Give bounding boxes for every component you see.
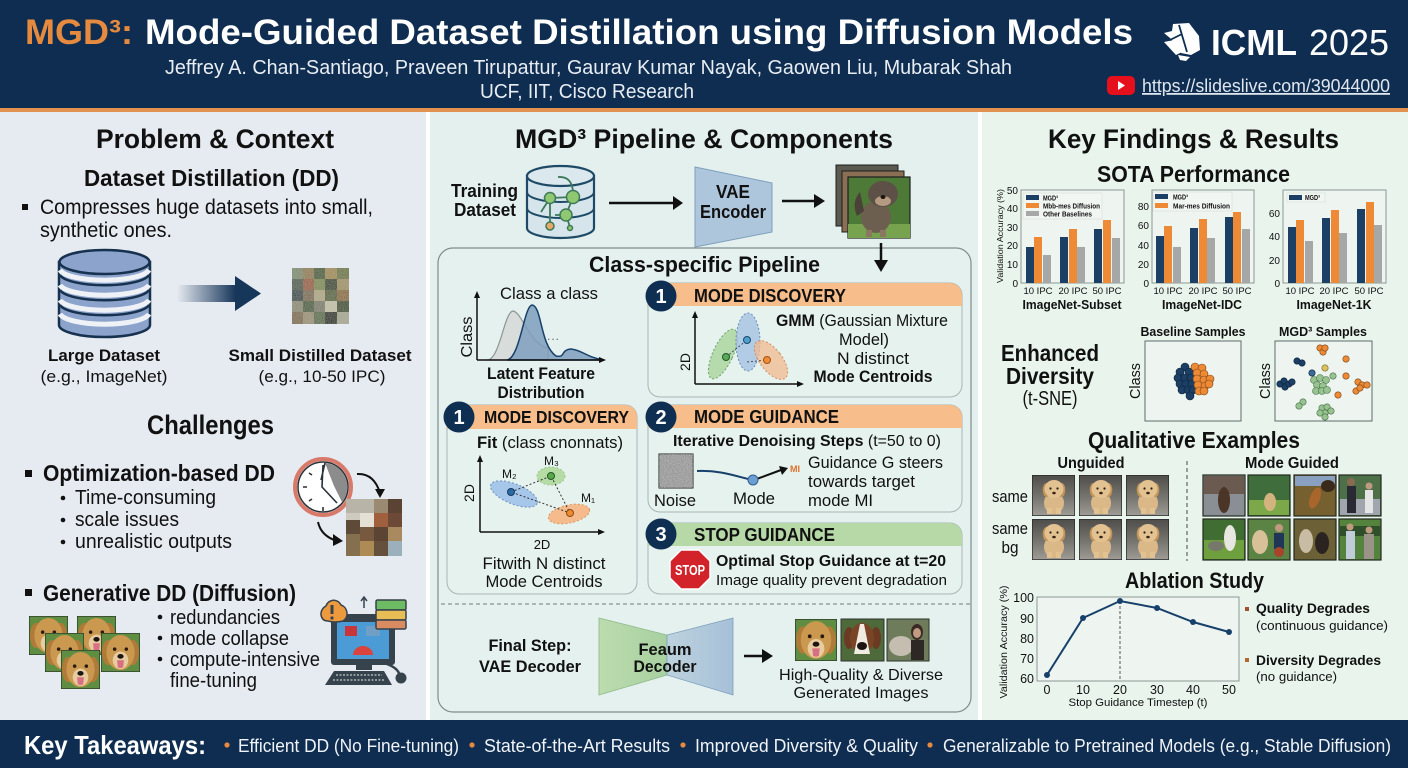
bar chart: ImageNet-IDC: 10 IPC <box>1153 286 1183 297</box>
text: generated images caption: High-Quality & Diverse <box>779 667 943 684</box>
line chart: stop guidance timestep: Stop Guidance Timestep (t) <box>1068 697 1208 709</box>
bar chart: ImageNet-1K: 10 IPC <box>1285 286 1315 297</box>
card: stop guidance: Image quality prevent degradation <box>716 572 947 589</box>
bar chart: ImageNet-IDC: 50 IPC <box>1222 286 1252 297</box>
line chart: stop guidance timestep: 60 <box>1020 672 1034 686</box>
bar chart: ImageNet-Subset: Mbb-mes Diffusion <box>1043 204 1100 210</box>
footer: key takeaways: Key Takeaways: <box>24 730 206 760</box>
text: GMM description: GMM (Gaussian Mixture <box>776 312 948 330</box>
generated images <box>795 619 929 661</box>
text: GMM description: Model) <box>839 331 889 349</box>
challenge: generative diffusion: mode collapse <box>170 628 289 650</box>
panel: pipeline and components <box>430 112 978 720</box>
line chart: stop guidance timestep: 70 <box>1020 652 1034 666</box>
bar chart: ImageNet-Subset: 50 IPC <box>1092 286 1122 297</box>
text: enhanced diversity: (t-SNE) <box>1022 388 1078 410</box>
arrow: distillation <box>177 276 261 311</box>
decoder block <box>599 618 733 695</box>
chart: latent feature distribution: Latent Feature <box>487 364 595 383</box>
label: training dataset: Training <box>451 181 518 201</box>
dashed separator <box>1186 461 1188 561</box>
divider <box>441 603 970 605</box>
line chart: stop guidance timestep: 0 <box>1044 683 1051 697</box>
chart: fitted modes: 2D <box>534 537 550 552</box>
bar chart: ImageNet-Subset: 50 <box>1007 186 1018 197</box>
line chart: stop guidance timestep: 10 <box>1076 683 1090 697</box>
line chart: stop guidance timestep: Validation Accuracy (%) <box>998 586 1010 698</box>
VAE encoder block: VAE <box>716 182 750 202</box>
step badge 2: 2 <box>655 407 667 429</box>
bar chart: ImageNet-1K: ImageNet-1K <box>1296 298 1372 312</box>
card: mode guidance: MODE GUIDANCE <box>694 407 839 427</box>
text: guidance description: Guidance G steers <box>808 454 943 472</box>
image: distilled mosaic <box>292 268 349 324</box>
chart: latent feature distribution: Distribution <box>498 383 584 402</box>
bar chart: ImageNet-1K: 50 IPC <box>1354 286 1384 297</box>
definition bullet: Compresses huge datasets into small, <box>40 196 373 219</box>
line chart: stop guidance timestep: 40 <box>1186 683 1200 697</box>
footer: key takeaways: Efficient DD (No Fine-tuning) <box>238 736 459 756</box>
step badge 3: 3 <box>655 524 667 546</box>
image grid: unguided: Unguided <box>1058 455 1124 472</box>
decoder block: Decoder <box>634 657 697 676</box>
final step label: VAE Decoder <box>479 657 581 676</box>
image grid: mode guided <box>1203 455 1381 560</box>
ICML 2025 logo: ICML <box>1211 22 1297 63</box>
bar chart: ImageNet-IDC: 60 <box>1138 221 1149 232</box>
image stack: redundant golden retrievers <box>29 616 140 689</box>
text: GMM description <box>776 312 948 386</box>
text: GMM description: Mode Centroids <box>814 368 932 386</box>
bar chart: ImageNet-Subset: 30 <box>1007 223 1018 234</box>
guidance trajectory <box>697 464 800 508</box>
bar chart: ImageNet-1K: MGD³ <box>1305 195 1321 202</box>
video link: https://slideslive.com/39044000 <box>1142 76 1390 96</box>
bar chart: ImageNet-Subset: 10 <box>1007 260 1018 271</box>
icon: struggling computer <box>321 597 406 685</box>
text: generated images caption <box>779 667 943 702</box>
image grid: mode guided: Mode Guided <box>1245 455 1339 472</box>
card: mode guidance <box>646 402 962 512</box>
scatter plot: MGD3 samples <box>1257 324 1372 421</box>
line chart: stop guidance timestep: 90 <box>1020 612 1034 626</box>
heading: key findings: Key Findings & Results <box>1048 124 1339 154</box>
card: mode guidance: Noise <box>654 492 696 510</box>
line chart: stop guidance timestep: 20 <box>1113 683 1127 697</box>
card: mode discovery fit: Mode Centroids <box>486 572 602 591</box>
authors and affiliations <box>165 57 1012 103</box>
authors and affiliations: UCF, IIT, Cisco Research <box>480 81 694 103</box>
definition bullet <box>22 196 373 242</box>
bar chart: ImageNet-1K: 60 <box>1269 209 1280 220</box>
step badge 1: 1 <box>453 407 465 429</box>
scatter plot: baseline samples: Class <box>1127 363 1144 399</box>
line chart: stop guidance timestep: 80 <box>1020 632 1034 646</box>
callout: diversity degrades: (no guidance) <box>1256 669 1337 684</box>
bar chart: ImageNet-Subset: 40 <box>1007 204 1018 215</box>
bar chart: ImageNet-1K: 0 <box>1274 279 1280 290</box>
text: generated images caption: Generated Images <box>794 685 928 702</box>
chart: fitted modes: M₃ <box>544 454 559 468</box>
panel: problem and context <box>0 112 426 720</box>
callout: diversity degrades: Diversity Degrades <box>1256 652 1381 668</box>
card: stop guidance: Optimal Stop Guidance at t=20 <box>716 553 946 570</box>
line chart: stop guidance timestep: 50 <box>1222 683 1236 697</box>
footer: key takeaways: Improved Diversity & Quality <box>695 736 918 756</box>
label: large dataset: Large Dataset <box>48 346 160 365</box>
bar chart: ImageNet-IDC: Mar-mes Diffusion <box>1173 204 1230 210</box>
bar chart: ImageNet-IDC: 20 <box>1138 260 1149 271</box>
callout: diversity degrades <box>1245 652 1381 684</box>
footer: key takeaways: Generalizable to Pretrained Models (e.g., Stable Diffusion) <box>943 736 1391 756</box>
text: GMM description: N distinct <box>837 350 909 368</box>
icon: large database <box>59 250 150 337</box>
challenge: optimization-based: Time-consuming <box>75 487 216 509</box>
card: mode discovery fit: MODE DISCOVERY <box>484 407 629 427</box>
bar chart: ImageNet-Subset: 0 <box>1012 279 1018 290</box>
label: training dataset: Dataset <box>454 200 516 220</box>
icon: stop sign <box>670 550 710 589</box>
panel: key findings and results <box>982 112 1408 720</box>
label: small distilled dataset: (e.g., 10-50 IPC) <box>258 367 386 386</box>
card: mode discovery GMM <box>646 280 962 397</box>
scatter plot: baseline samples <box>1127 324 1246 421</box>
bar chart: ImageNet-Subset <box>996 186 1124 312</box>
bar chart: ImageNet-Subset: 10 IPC <box>1023 286 1053 297</box>
heading: pipeline: MGD³ Pipeline & Components <box>515 124 893 154</box>
final step label: Final Step: <box>488 636 572 655</box>
image grid: unguided: same <box>992 487 1028 506</box>
arrow: encoder to latents <box>782 194 825 208</box>
heading: SOTA performance: SOTA Performance <box>1097 161 1290 187</box>
bar chart: ImageNet-IDC: MGD³ <box>1173 194 1189 202</box>
chart: fitted modes: 2D <box>461 484 477 502</box>
ICML 2025 logo: 2025 <box>1309 22 1389 63</box>
footer: key takeaways <box>0 720 1408 768</box>
chart: latent feature distribution: Class a class <box>500 284 598 303</box>
challenge: optimization-based <box>25 460 275 553</box>
text: enhanced diversity: Enhanced <box>1001 340 1099 366</box>
authors and affiliations: Jeffrey A. Chan-Santiago, Praveen Tirupattur, Gaurav Kumar Nayak, Gaowen Liu, Mubarak Shah <box>165 57 1012 79</box>
image: noise <box>659 454 693 488</box>
text: guidance description <box>808 454 943 510</box>
challenge: optimization-based: Optimization-based DD <box>43 460 275 486</box>
decoder block: Feaum <box>638 640 692 659</box>
bar chart: ImageNet-1K: 20 <box>1269 256 1280 267</box>
card: mode discovery GMM: MODE DISCOVERY <box>694 286 846 306</box>
arrow: decoder to images <box>744 649 773 663</box>
challenge: generative diffusion: Generative DD (Diffusion) <box>43 580 296 606</box>
step badge 1 <box>646 280 676 312</box>
callout: quality degrades: (continuous guidance) <box>1256 618 1388 633</box>
callout: quality degrades: Quality Degrades <box>1256 600 1370 616</box>
bar chart: ImageNet-Subset: Validation Accuracy (%) <box>996 189 1005 283</box>
icon: training database network <box>527 166 594 238</box>
line chart: stop guidance timestep: 100 <box>1013 591 1034 605</box>
step badge 3 <box>646 518 676 550</box>
ICML 2025 logo <box>1164 22 1389 63</box>
label: large dataset <box>40 346 168 386</box>
card: mode discovery fit: Fit (class cnonnats) <box>477 433 623 452</box>
chart: latent feature distribution: ... <box>547 329 560 343</box>
image stack: dog latents <box>836 165 910 238</box>
scatter plot: MGD3 samples: Class <box>1257 363 1274 399</box>
card: stop guidance <box>646 518 962 594</box>
heading: dataset distillation: Dataset Distillation (DD) <box>84 165 339 191</box>
challenge: generative diffusion: fine-tuning <box>170 670 257 692</box>
arrow: latents into pipeline <box>874 243 888 272</box>
chart: fitted modes: M₂ <box>502 467 517 481</box>
bar chart: ImageNet-Subset: MGD³ <box>1043 196 1059 202</box>
bar chart: ImageNet-Subset: 20 <box>1007 241 1018 252</box>
chart: fitted modes <box>461 454 605 552</box>
header banner <box>0 0 1408 112</box>
heading: challenges: Challenges <box>147 410 274 440</box>
heading: qualitative examples: Qualitative Examples <box>1088 427 1300 453</box>
heading: class-specific pipeline: Class-specific Pipeline <box>589 252 820 277</box>
bar chart: ImageNet-1K: 20 IPC <box>1319 286 1349 297</box>
callout: quality degrades <box>1245 600 1388 633</box>
line chart: stop guidance timestep: 30 <box>1150 683 1164 697</box>
image details <box>1204 476 1380 559</box>
label: small distilled dataset <box>228 346 412 386</box>
definition bullet: synthetic ones. <box>40 219 172 242</box>
bar chart: ImageNet-1K: 40 <box>1269 232 1280 243</box>
guidance trajectory: Mode <box>733 490 775 508</box>
step badge 1 <box>444 402 474 432</box>
chart: overlapping gaussians <box>677 311 804 387</box>
bar chart: ImageNet-Subset: Other Baselines <box>1043 212 1092 218</box>
VAE encoder block <box>695 167 772 247</box>
guidance trajectory: MI <box>790 464 800 474</box>
heading: problem and context: Problem & Context <box>96 124 334 154</box>
bar chart: ImageNet-Subset: 20 IPC <box>1058 286 1088 297</box>
chart: latent feature distribution <box>459 284 606 402</box>
chart: fitted modes: M₁ <box>581 491 595 505</box>
challenge: generative diffusion <box>25 580 320 692</box>
image grid: unguided: same <box>992 519 1028 538</box>
label: training dataset <box>451 181 518 220</box>
chart: latent feature distribution: Class <box>459 316 476 358</box>
line chart: stop guidance timestep <box>998 586 1239 709</box>
card: mode guidance: Iterative Denoising Steps (t=50 to 0) <box>673 433 941 450</box>
step badge 2 <box>646 402 676 432</box>
card: mode discovery fit: Fitwith N distinct <box>482 554 606 573</box>
label: large dataset: (e.g., ImageNet) <box>40 367 168 386</box>
scatter plot: MGD3 samples: MGD³ Samples <box>1279 324 1367 339</box>
title: Mode-Guided Dataset Distillation using Diffusion Models <box>145 13 1133 52</box>
footer: key takeaways: State-of-the-Art Results <box>484 736 670 756</box>
arrow: dataset to encoder <box>609 196 683 210</box>
heading: ablation study: Ablation Study <box>1125 568 1265 593</box>
text: guidance description: mode MI <box>808 492 873 510</box>
challenge: generative diffusion: redundancies <box>170 607 280 629</box>
bar chart: ImageNet-Subset: ImageNet-Subset <box>1022 298 1122 312</box>
bar chart: ImageNet-IDC: 20 IPC <box>1188 286 1218 297</box>
VAE encoder block: Encoder <box>700 202 766 222</box>
text: enhanced diversity: Diversity <box>1006 363 1094 389</box>
title: MGD³: <box>25 13 133 52</box>
final step label <box>479 636 581 676</box>
bar chart: ImageNet-IDC: 0 <box>1143 279 1149 290</box>
text: enhanced diversity <box>1001 340 1099 410</box>
scatter plot: baseline samples: Baseline Samples <box>1140 324 1246 339</box>
bar chart: ImageNet-IDC: ImageNet-IDC <box>1162 298 1242 312</box>
challenge: optimization-based: scale issues <box>75 509 179 531</box>
card: stop guidance: STOP GUIDANCE <box>694 525 835 545</box>
challenge: optimization-based: unrealistic outputs <box>75 531 232 553</box>
label: small distilled dataset: Small Distilled Dataset <box>228 346 412 365</box>
challenge: generative diffusion: compute-intensive <box>170 649 320 671</box>
card: mode discovery fit <box>444 402 637 594</box>
icon: stop sign: STOP <box>675 562 705 579</box>
bar chart: ImageNet-1K <box>1269 190 1386 312</box>
class-specific pipeline container <box>438 243 971 712</box>
chart: overlapping gaussians: 2D <box>677 353 693 371</box>
text: guidance description: towards target <box>808 473 915 491</box>
bar chart: ImageNet-IDC: 40 <box>1138 241 1149 252</box>
bar chart: ImageNet-IDC <box>1138 190 1254 312</box>
image grid: unguided: bg <box>1002 538 1018 557</box>
icon: clock to pixelated image <box>295 459 402 556</box>
step badge 1: 1 <box>655 286 667 308</box>
bar chart: ImageNet-IDC: 80 <box>1138 202 1149 213</box>
image grid: unguided <box>992 455 1169 560</box>
